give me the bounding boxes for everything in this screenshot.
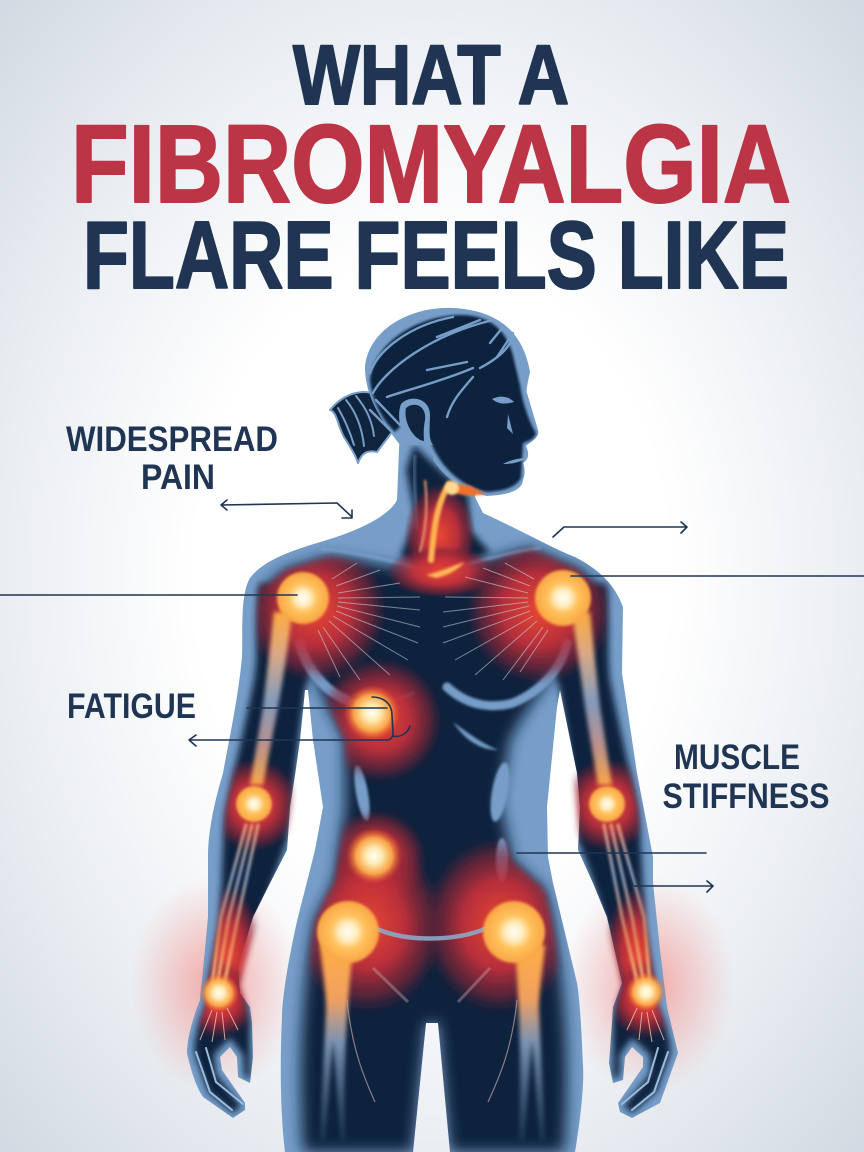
radiating nerve lines: [318, 563, 548, 680]
label: widespread pain: WIDESPREAD: [66, 420, 278, 459]
neck streak band: [414, 455, 417, 530]
ear: [399, 399, 433, 446]
dark body interior: [194, 445, 670, 1152]
hair strands: [370, 317, 513, 438]
neck glow: [386, 480, 498, 598]
pain point: right wrist: [626, 972, 666, 1012]
pain point: left elbow: [236, 786, 272, 822]
label: widespread pain: [66, 420, 278, 497]
hip band: [375, 928, 487, 938]
outer red glow around wrists: [130, 875, 735, 1095]
label: muscle stiffness: [662, 738, 830, 816]
collar bands: [322, 548, 540, 570]
pain point: right hip: [483, 901, 545, 963]
pain point: right shoulder: [535, 570, 591, 626]
body silhouette: [187, 425, 678, 1152]
pain point: chest: [344, 685, 400, 741]
title: WHAT A: [293, 28, 569, 122]
thin thigh lines: [347, 968, 517, 1102]
arm bones: [250, 612, 612, 785]
title: [71, 28, 791, 309]
head: [365, 308, 538, 496]
label: muscle stiffness: STIFFNESS: [662, 777, 830, 816]
label: fatigue: FATIGUE: [67, 687, 196, 726]
pain point: left hip: [317, 901, 379, 963]
inner ear: [405, 405, 425, 441]
hand finger lines: [196, 1048, 668, 1110]
pain point: left shoulder: [277, 572, 329, 624]
abdominal muscle highlights: [351, 722, 513, 882]
pain point: right elbow: [589, 786, 625, 822]
face highlights: [492, 397, 526, 464]
label: widespread pain: PAIN: [141, 458, 215, 497]
pain point: left wrist: [199, 973, 239, 1013]
hair and face interior: [370, 315, 536, 492]
label: muscle stiffness: MUSCLE: [674, 738, 800, 777]
leg bands: [320, 945, 545, 1140]
ponytail: [330, 392, 392, 463]
red inflammation zones: [181, 536, 684, 1038]
pain point: abdomen: [346, 828, 402, 884]
ponytail strands: [338, 396, 374, 446]
forearm bands: [212, 825, 650, 985]
human figure: [187, 308, 678, 1152]
wrist rays: [200, 1008, 664, 1042]
pectoral bands: [300, 643, 567, 706]
arrows and leader lines: [0, 500, 864, 892]
